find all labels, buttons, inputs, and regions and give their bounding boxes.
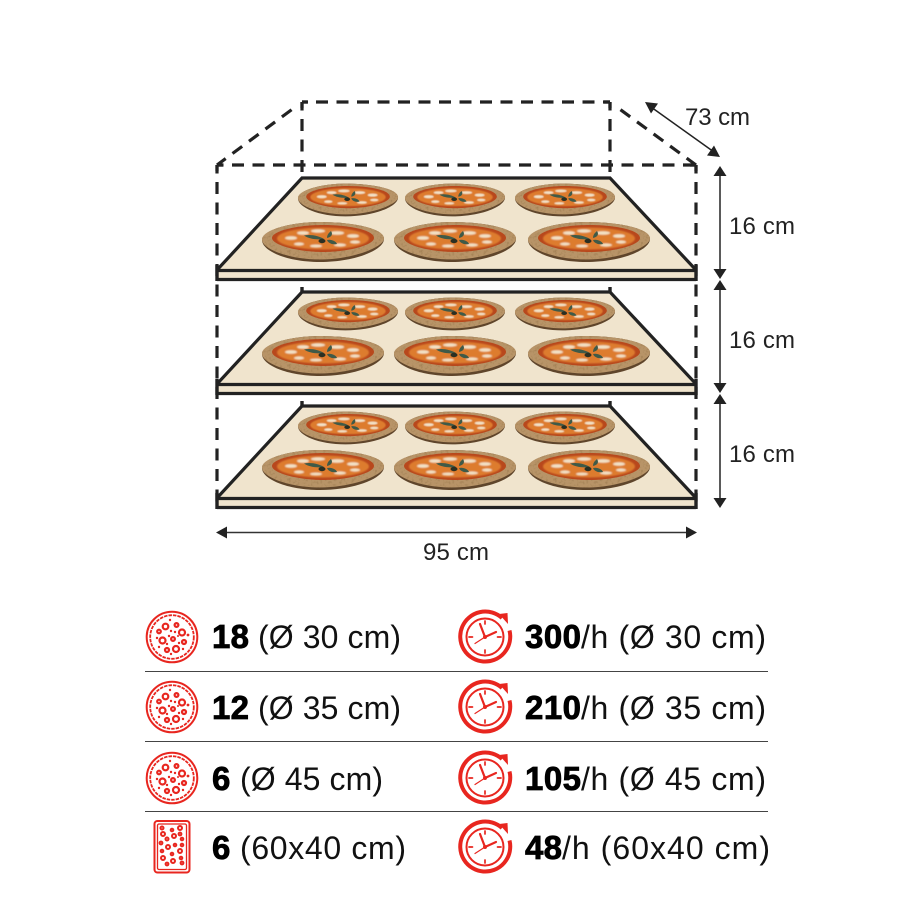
table dividers bbox=[145, 672, 768, 812]
icon: clock row 4 bbox=[460, 822, 510, 872]
capacity row 4: 6 bbox=[212, 829, 230, 866]
label: depth: 73 cm bbox=[685, 104, 750, 131]
capacity row 3: (Ø 45 cm) bbox=[240, 761, 383, 797]
icon: rectangular pizza tray bbox=[154, 821, 190, 872]
arrow: height 2 bbox=[714, 280, 726, 393]
icon: pizza row 1 bbox=[147, 612, 197, 662]
capacity row 3: 6 bbox=[212, 760, 230, 797]
arrow: depth 73 cm bbox=[645, 102, 720, 157]
output row 3: 105 bbox=[525, 760, 581, 797]
capacity row 1: (Ø 30 cm) bbox=[258, 619, 401, 655]
label: height 2: 16 cm bbox=[729, 327, 795, 354]
label: height 3: 16 cm bbox=[729, 441, 795, 468]
oven dashed outline bbox=[217, 102, 696, 508]
output row 1: 300 bbox=[525, 618, 581, 655]
output row 3: /h (Ø 45 cm) bbox=[581, 761, 766, 797]
output row 4: 48 bbox=[525, 829, 562, 866]
icon: pizza row 3 bbox=[147, 753, 197, 803]
arrow: width 95 cm bbox=[216, 526, 697, 538]
capacity row 2: (Ø 35 cm) bbox=[258, 690, 401, 726]
arrow: height 3 bbox=[714, 394, 726, 508]
capacity row 4: (60x40 cm) bbox=[240, 830, 406, 866]
arrow: height 1 bbox=[714, 166, 726, 279]
deck 2 with pizzas bbox=[217, 287, 696, 395]
icon: pizza row 2 bbox=[147, 682, 197, 732]
output row 1: /h (Ø 30 cm) bbox=[581, 619, 766, 655]
label: height 1: 16 cm bbox=[729, 213, 795, 240]
output row 2: /h (Ø 35 cm) bbox=[581, 690, 766, 726]
output row 4: /h (60x40 cm) bbox=[562, 830, 770, 866]
label: width: 95 cm bbox=[423, 539, 489, 566]
icon: clock row 1 bbox=[460, 612, 510, 662]
deck 1 with pizzas bbox=[217, 178, 696, 281]
capacity row 1: 18 bbox=[212, 618, 249, 655]
capacity row 2: 12 bbox=[212, 689, 249, 726]
icon: clock row 3 bbox=[460, 753, 510, 803]
output row 2: 210 bbox=[525, 689, 581, 726]
deck 3 with pizzas bbox=[217, 401, 696, 509]
icon: clock row 2 bbox=[460, 682, 510, 732]
